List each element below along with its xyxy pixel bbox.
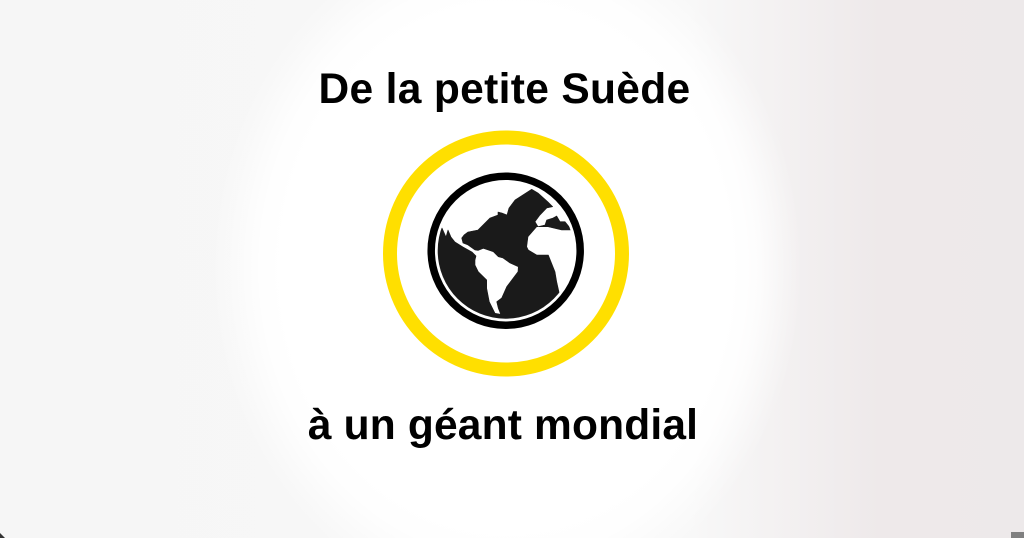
black globe outline [431, 176, 580, 325]
title: bottom line: à un géant mondial [308, 402, 698, 449]
icon: globe in yellow ring [383, 130, 629, 376]
continents [438, 189, 571, 319]
corner mark: bottom left [0, 533, 5, 538]
title: top line: De la petite Suède [318, 66, 691, 113]
yellow ring [390, 138, 622, 370]
corner mark: bottom right [1011, 532, 1024, 538]
